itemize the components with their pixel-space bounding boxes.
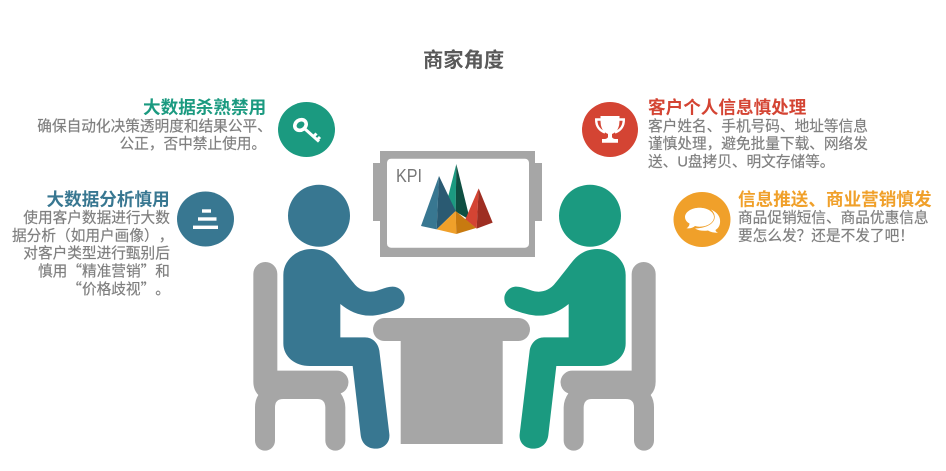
monitor frame	[373, 151, 542, 257]
text block: customer data analysis: 慎用“精准营销”和	[38, 260, 170, 281]
text block: customer details: 谨慎处理，避免批量下载、网络发	[648, 136, 868, 153]
monitor with KPI chart	[373, 151, 542, 257]
right chair	[561, 262, 656, 451]
text block: automated decisions: 确保自动化决策透明度和结果公平、	[37, 118, 272, 135]
text block: automated decisions: 公正，否中禁止使用。	[120, 136, 266, 153]
panel: personal information	[582, 97, 868, 170]
text block: customer data analysis	[12, 210, 173, 299]
heading: 客户个人信息慎处理: 客户个人信息慎处理	[648, 97, 807, 117]
icon: trophy	[582, 102, 638, 157]
text block: customer data analysis: 据分析	[12, 228, 56, 244]
text block: automated decisions	[37, 118, 272, 153]
panel: marketing messages	[674, 189, 932, 247]
heading: 信息推送、商业营销慎发: 信息推送、商业营销慎发	[738, 189, 932, 209]
panel: big data analysis	[12, 189, 234, 299]
body	[504, 249, 626, 449]
head	[559, 185, 621, 247]
text block: customer data analysis: 使用客户数据进行大数	[23, 210, 170, 227]
right person	[504, 185, 626, 449]
text block: customer details	[648, 117, 868, 170]
body	[283, 249, 405, 449]
left person	[283, 185, 405, 449]
text block: customer data analysis: （	[56, 228, 71, 244]
icon: key	[278, 102, 335, 157]
monitor screen	[387, 159, 529, 248]
heading: 大数据分析慎用: 大数据分析慎用	[46, 189, 170, 209]
text block: promotional messages	[738, 210, 929, 244]
text block: promotional messages: 商品促销短信、商品优惠信息	[738, 210, 929, 227]
text block: customer data analysis: 对客户类型进行甄别后	[23, 245, 170, 262]
KPI label: KPI	[396, 166, 422, 186]
left chair	[253, 262, 348, 451]
text block: customer data analysis: ，	[159, 228, 173, 244]
icon: chat bubbles	[674, 192, 730, 247]
text block: promotional messages: 要怎么发？还是不发了吧！	[738, 228, 914, 244]
pyramid chart	[421, 164, 493, 234]
icon: stacked bars	[177, 192, 234, 246]
title: 商家角度	[423, 48, 504, 72]
head	[288, 185, 350, 247]
text block: customer data analysis: 如用户画像	[71, 228, 144, 244]
text block: customer details: 送、U盘拷贝、明文存储等。	[648, 152, 834, 170]
heading: 大数据杀熟禁用: 大数据杀熟禁用	[143, 97, 266, 117]
text block: customer details: 客户姓名、手机号码、地址等信息	[648, 117, 868, 135]
text block: customer data analysis: “价格歧视”。	[67, 278, 170, 299]
table	[373, 318, 530, 444]
text block: customer data analysis: ）	[144, 228, 159, 244]
panel: big data price discrimination	[37, 97, 335, 157]
